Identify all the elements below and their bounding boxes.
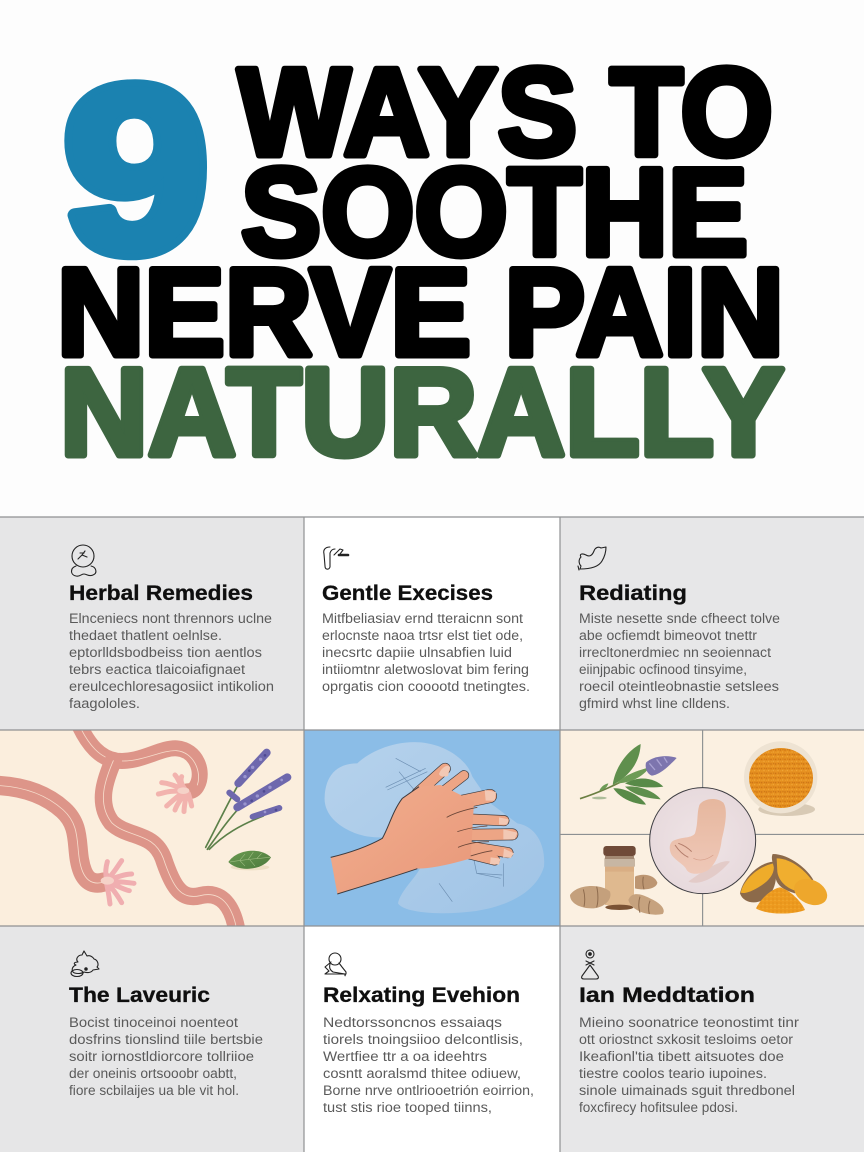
heading: Herbal Remedies [69, 582, 253, 605]
body text: abe ocfiemdt bimeovot tnettr [579, 628, 758, 643]
body text: eptorlldsbodbeiss tion aentlos [69, 645, 262, 660]
body text: Mieino soonatrice teonostimt tinr [579, 1015, 800, 1030]
body text [69, 611, 274, 711]
grid lines [0, 517, 864, 1152]
body text: inecsrtc dapiie ulnsabfien luid [322, 645, 512, 660]
icon: herbal head [72, 545, 96, 576]
icon: person [325, 953, 346, 976]
title line: WAYS TO: WAYS TO [238, 44, 773, 182]
body text: soitr iornostldiorcore tollriioe [69, 1049, 254, 1064]
body text: dosfrins tionslind tiile bertsbie [69, 1032, 263, 1047]
nerve fibres [0, 723, 237, 933]
turmeric slices [740, 854, 831, 914]
jar and turmeric roots [570, 846, 664, 915]
body text: ott oriostnct sxkosit tesloims oetor [579, 1032, 794, 1047]
body text: Mitfbeliasiav ernd tteraicnn sont [322, 611, 523, 626]
icon: exercise figure [324, 547, 348, 569]
body text: irrecltonerdmiec nn seoiennact [579, 645, 771, 660]
panel: Herbal Remedies [0, 517, 304, 730]
body text: der oneinis ortsooobr oabtt, [69, 1066, 237, 1081]
body text: cosntt aoralsmd thitee odiuew, [323, 1066, 521, 1081]
body text: erlocnste naoa trtsr elst tiet ode, [322, 628, 523, 643]
turmeric powder bowl [744, 741, 817, 816]
body text: ereulcechloresagosiict intikolion [69, 679, 274, 694]
heading: Rediating [579, 582, 687, 605]
icon: bird [578, 547, 606, 570]
body text: fiore scbilaijes ua ble vit hol. [69, 1083, 239, 1098]
body text: intiiomtnr aletwoslovat bim fering [322, 662, 529, 677]
body text [322, 611, 530, 694]
heading: Relxating Evehion [323, 984, 520, 1007]
heading: Gentle Execises [322, 582, 493, 605]
grid lines [560, 730, 864, 926]
herb sprig [580, 744, 677, 805]
panel: Ian Meddtation [560, 926, 864, 1152]
body text: tebrs eactica tlaicoiafignaet [69, 662, 245, 677]
illustration: hand on soothing shape [304, 730, 560, 926]
body text [579, 611, 780, 711]
body text: Borne nrve ontlriooetrión eoirrion, [323, 1083, 534, 1098]
body text [323, 1015, 534, 1115]
body text [579, 1015, 800, 1115]
green leaf [228, 851, 271, 870]
title numeral 9: 9 [63, 38, 209, 302]
body text: eiinjpabic ocfinood tinsyime, [579, 662, 747, 677]
body text: Ikeafionl'tia tibett aitsuotes doe [579, 1049, 784, 1064]
body text: Wertfiee ttr a oa ideehtrs [323, 1049, 487, 1064]
icon: herb cluster [71, 951, 99, 976]
body text [69, 1015, 263, 1098]
panel: Rediating [560, 517, 864, 730]
body text: tiestre coolos teario iupoines. [579, 1066, 767, 1081]
nerve ending: lower [101, 861, 134, 904]
body text: Nedtorssoncnos essaiaqs [323, 1015, 502, 1030]
body text: tiorels tnoingsiioo delcontlisis, [323, 1032, 523, 1047]
body text: oprgatis cion cooootd tnetingtes. [322, 679, 530, 694]
body text: roecil oteintleobnastie setslees [579, 679, 779, 694]
body text: faagololes. [69, 696, 140, 711]
body text: gfmird whst line clldens. [579, 696, 730, 711]
body text: sinole uimainads sguit thredbonel [579, 1083, 795, 1098]
page background [0, 0, 864, 517]
heading: The Laveuric [69, 984, 210, 1007]
body text: thedaet thatlent oelnlse. [69, 628, 222, 643]
panel: The Laveuric [0, 926, 304, 1152]
illustration: natural remedies grid [560, 730, 864, 926]
body text: Bocist tinoceinoi noenteot [69, 1015, 238, 1030]
translucent nerve shape [325, 742, 544, 913]
body text: tust stis rioe tooped tiinns, [323, 1100, 492, 1115]
title line: SOOTHE: SOOTHE [241, 144, 748, 282]
panel: Gentle Execises [304, 517, 560, 730]
body text: Elnceniecs nont thrennors uclne [69, 611, 272, 626]
panel: Relxating Evehion [304, 926, 560, 1152]
body text: Miste nesette snde cfheect tolve [579, 611, 780, 626]
icon: meditation figure [582, 950, 598, 979]
body text: foxcfirecy hofitsulee pdosi. [579, 1100, 738, 1115]
lavender sprigs [206, 753, 287, 849]
title line: NERVE PAIN: NERVE PAIN [57, 244, 784, 382]
heading: Ian Meddtation [579, 984, 755, 1007]
nerve ending: upper [158, 775, 192, 812]
central circle with foot [650, 788, 756, 894]
title line: NATURALLY: NATURALLY [60, 344, 784, 482]
hand [331, 766, 517, 894]
illustration: nerves and lavender [0, 723, 304, 933]
title [57, 38, 784, 482]
